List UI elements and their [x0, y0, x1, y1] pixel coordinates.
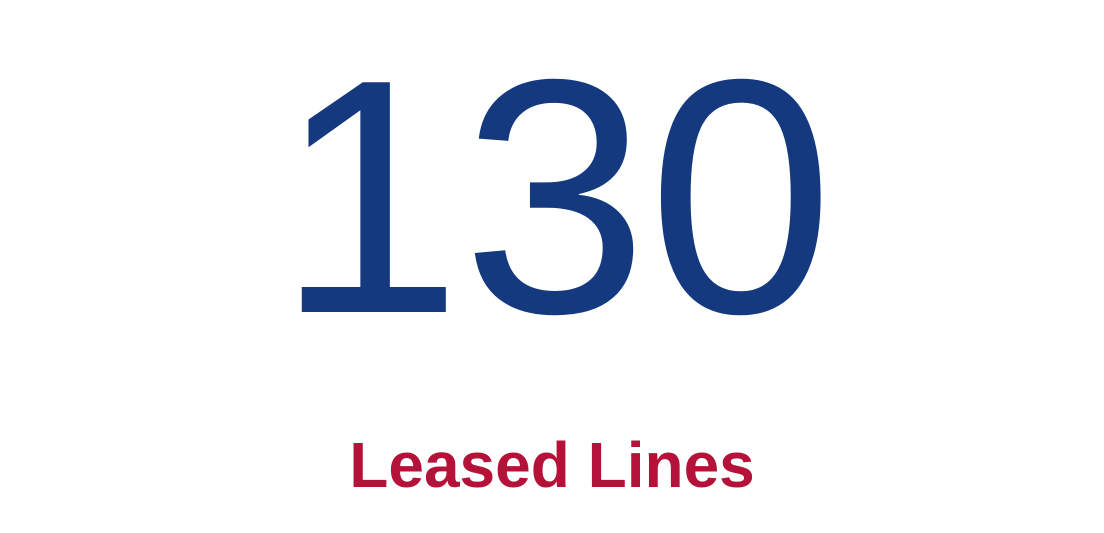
- big number: 130: [276, 10, 834, 383]
- label: Leased Lines: Leased Lines: [349, 429, 755, 501]
